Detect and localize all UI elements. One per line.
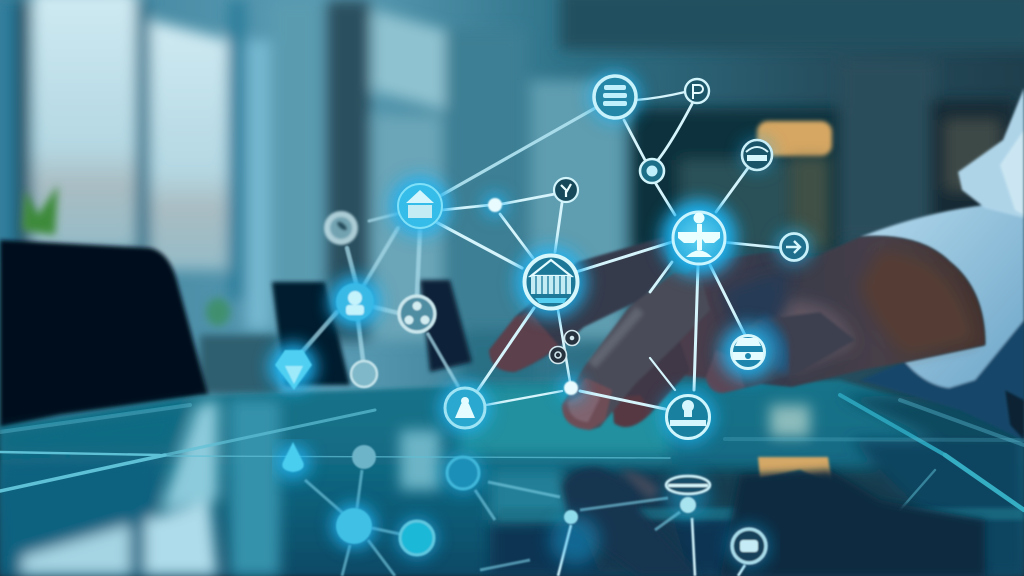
background chairs — [0, 240, 472, 428]
glow halos — [269, 71, 812, 445]
hand: back and wrist — [640, 236, 985, 387]
node: ring icon — [640, 159, 664, 183]
table reflection of network — [275, 442, 771, 576]
table reflected lamp — [758, 457, 832, 484]
node: letter icon — [685, 79, 709, 103]
hand: middle finger — [562, 273, 710, 430]
node: scales of justice icon — [673, 212, 725, 264]
node: diamond icon — [275, 350, 312, 390]
hand: index finger — [489, 237, 670, 372]
node: card icon — [742, 140, 772, 170]
node: people icon — [445, 388, 485, 428]
node: lower stand icon — [666, 396, 710, 438]
node: fan icon — [399, 296, 435, 332]
shirt sleeve and cuff — [860, 88, 1024, 440]
hand: thumb — [706, 312, 855, 393]
background: blurred office — [0, 0, 1024, 430]
glass table — [0, 380, 1024, 576]
node: temple bank icon — [524, 256, 578, 308]
hand: ring finger — [612, 340, 690, 427]
node: library icon — [398, 184, 442, 228]
node: arrow icon — [780, 234, 808, 260]
node: small overlapping icons — [550, 330, 580, 364]
node: blurred key — [327, 214, 355, 242]
node: stacked layers icon — [594, 76, 636, 118]
node: small circle — [351, 361, 377, 387]
table reflection of hand — [562, 468, 985, 576]
network connector lines — [436, 92, 782, 409]
hand — [489, 236, 985, 430]
node: bright dots — [488, 198, 578, 395]
node: person hub — [336, 283, 374, 321]
background lamp — [757, 121, 832, 156]
node: thumb vehicle icon — [732, 336, 764, 368]
node: tool icon — [554, 178, 578, 202]
